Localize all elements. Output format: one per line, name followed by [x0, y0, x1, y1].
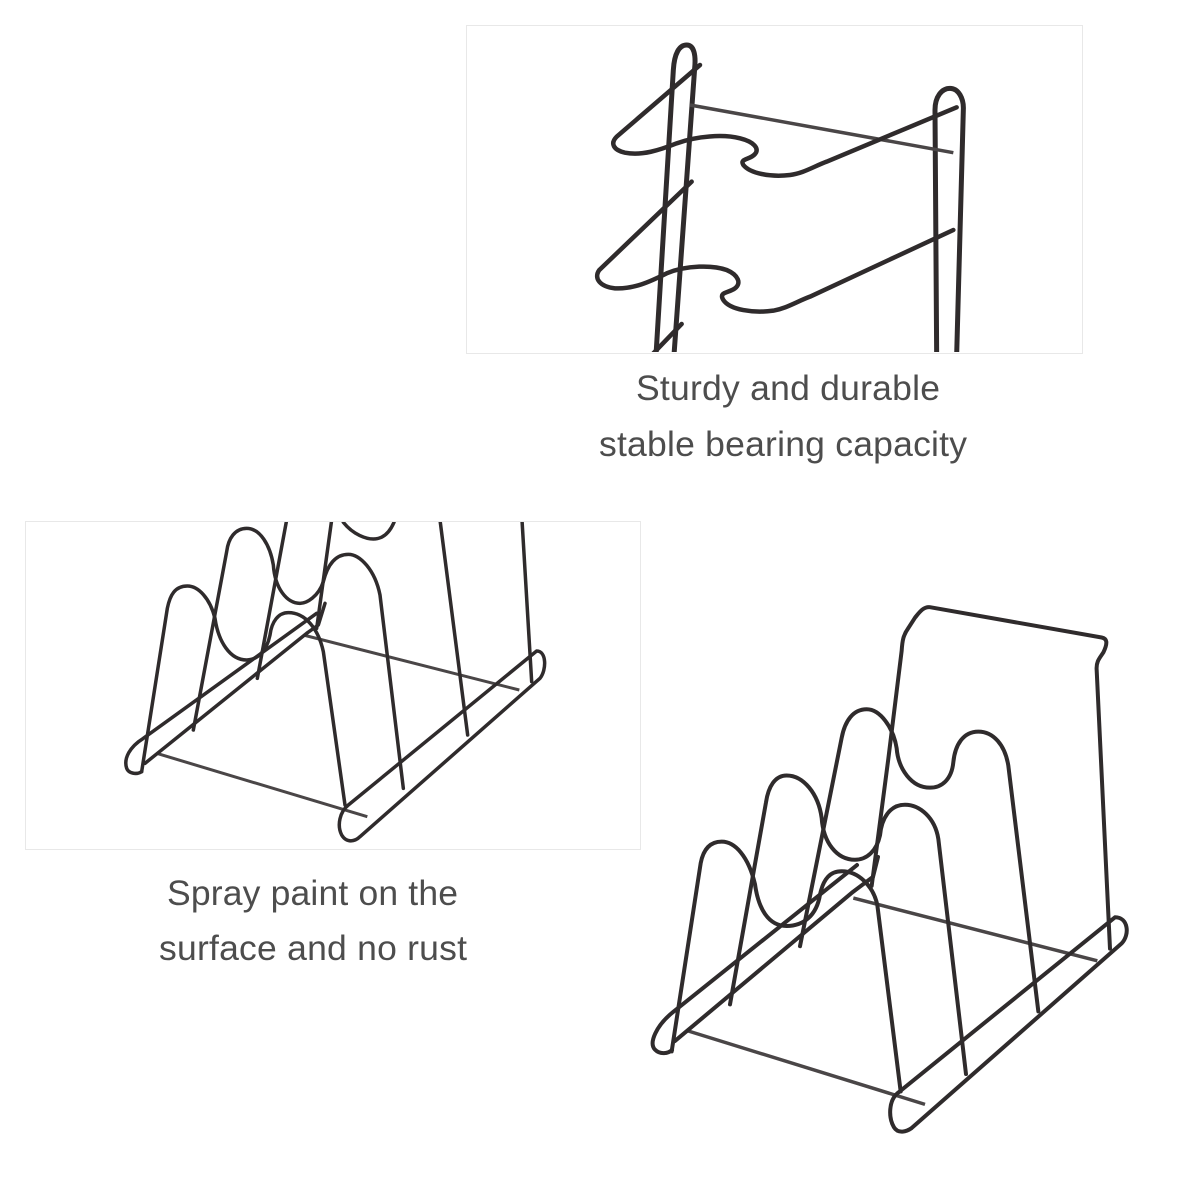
- text: sturdy and durable caption: [599, 368, 967, 464]
- left base rail: [653, 865, 857, 1053]
- middle wave wire: [730, 775, 966, 1074]
- panel: spray paint detail close-up: [26, 520, 640, 850]
- front wave wire: [672, 842, 901, 1091]
- back frame: [872, 607, 1110, 949]
- illustration: full wire rack: [653, 607, 1127, 1132]
- text: sturdy and durable caption: stable bearing capacity: [599, 424, 967, 464]
- illustration: rack base close-up: [126, 520, 545, 841]
- text: sturdy and durable caption: Sturdy and durable: [636, 368, 940, 408]
- text: spray paint caption: Spray paint on the: [167, 873, 458, 913]
- back wave wire: [800, 709, 1038, 1011]
- panel: sturdy detail close-up: [466, 26, 1082, 355]
- right base rail: [890, 917, 1127, 1132]
- illustration: upper rack wires close-up: [597, 45, 963, 355]
- text: spray paint caption: [159, 873, 467, 968]
- text: spray paint caption: surface and no rust: [159, 928, 467, 968]
